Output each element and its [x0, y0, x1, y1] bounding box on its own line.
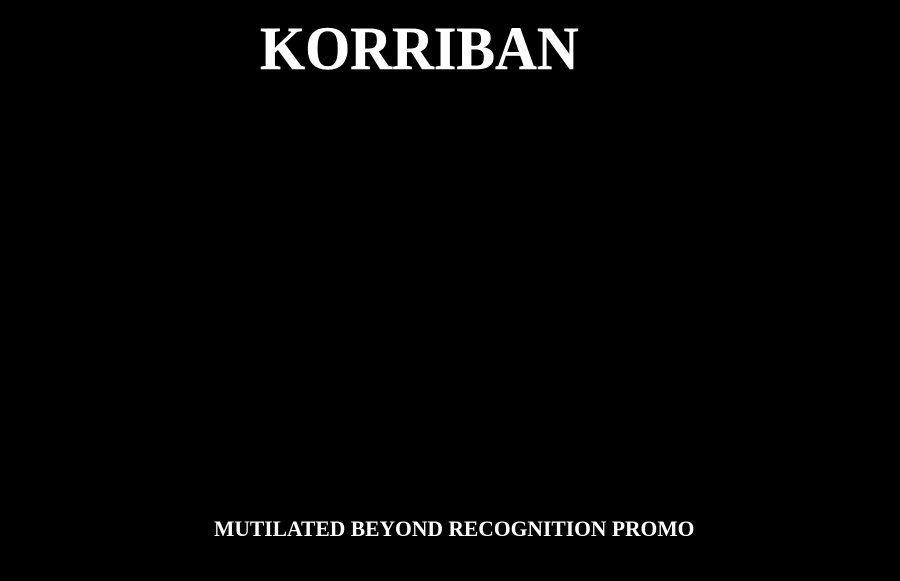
title: KORRIBAN [260, 16, 579, 83]
subtitle: promo caption: MUTILATED BEYOND RECOGNITION PROMO [214, 516, 694, 541]
